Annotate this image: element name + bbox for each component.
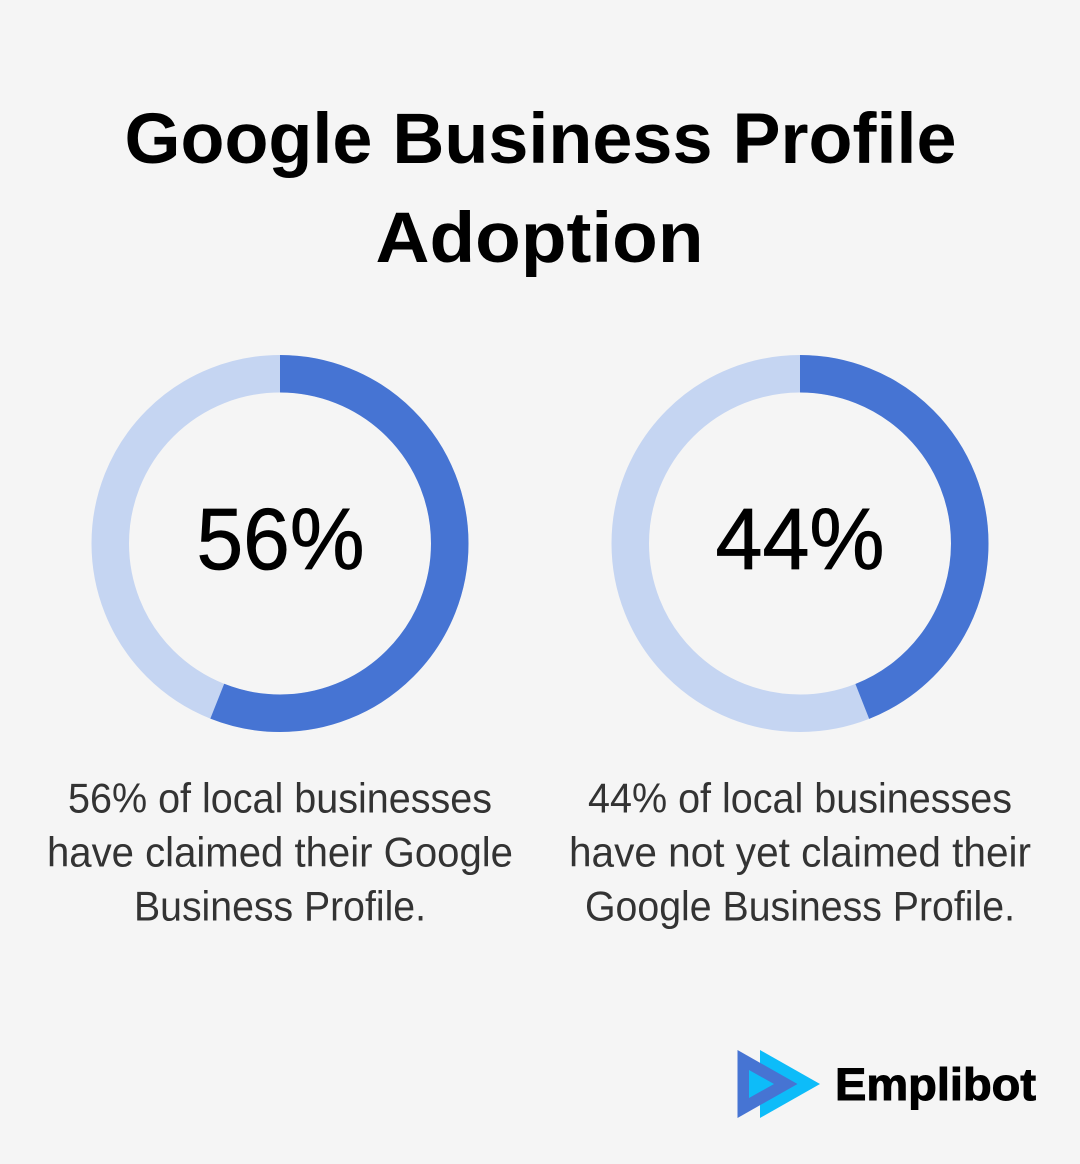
donut chart: 56%	[110, 374, 450, 713]
wordmark: Emplibot	[835, 1059, 1036, 1110]
description: 56%: have claimed their Google	[47, 828, 513, 876]
stat: 44%: 44%	[716, 491, 884, 588]
description: 44%: have not yet claimed their	[569, 828, 1031, 876]
description: 56%	[47, 774, 513, 930]
title	[124, 100, 956, 278]
panel: 44% not claimed	[569, 374, 1031, 930]
description: 44%	[569, 774, 1031, 930]
title: Google Business Profile	[124, 100, 956, 179]
title: Adoption	[376, 199, 704, 278]
description: 44%: Google Business Profile.	[585, 882, 1015, 930]
panel: 56% claimed	[47, 374, 513, 930]
logo: Emplibot	[738, 1050, 1036, 1118]
description: 44%: 44% of local businesses	[588, 774, 1012, 822]
icon: play triangles	[738, 1050, 820, 1118]
donut chart: 44%	[630, 374, 970, 713]
description: 56%: Business Profile.	[134, 882, 426, 930]
stat: 56%: 56%	[196, 491, 364, 588]
description: 56%: 56% of local businesses	[68, 774, 492, 822]
